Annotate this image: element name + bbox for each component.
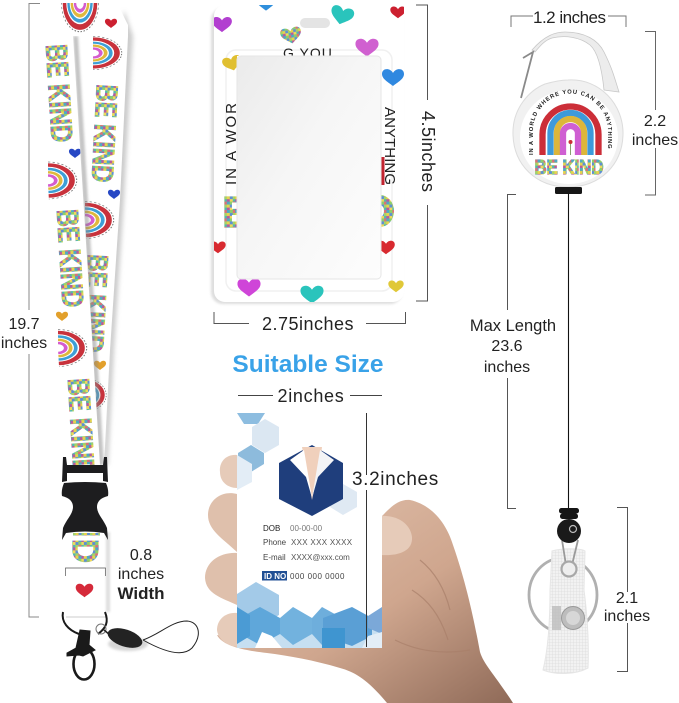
window [237,56,381,279]
holder print [210,0,406,303]
lanyard [39,3,198,680]
reel width bracket [511,16,626,27]
label: width: inches [118,566,164,583]
reel nub [555,187,582,194]
hand [205,455,513,703]
label: 2.2 inches [632,113,678,149]
finger 2 [208,493,237,552]
label: max length [470,317,556,376]
thumb tip [381,516,412,555]
clip height bracket [617,508,628,672]
left strap: BE KIND [39,43,78,143]
label: 1.2 inches: 1.2 inches [533,8,606,27]
reel arc text [533,94,608,155]
label: 2.1 inches: inches [604,608,650,625]
id card [237,413,382,648]
lanyard strap shadow [103,10,133,465]
lanyard top fold [39,3,128,36]
id text: Phone [263,538,287,547]
finger 3 [205,553,237,605]
palm and thumb [217,500,513,703]
id text: XXX XXX XXXX [291,538,353,547]
label: 3.2inches: 3.2inches [352,469,439,490]
id text: 00-00-00 [290,524,323,533]
id text [262,524,353,581]
label: 2.2 inches: 2.2 [644,113,666,130]
label: 2inches: 2inches [278,386,344,406]
badge reel: IN A WORLD WHERE YOU CAN BE ANYTHING [529,90,612,155]
id text: ID NO [264,572,286,581]
reel height bracket [645,32,656,195]
holder body [211,8,402,304]
reel be kind: BE KIND [534,157,604,179]
label: 2.1 inches: 2.1 [616,590,638,607]
label: inches: inches [1,335,47,352]
badge clip [529,508,597,674]
holder print: ANYTHING [381,107,398,185]
bracket: 2 inches [238,394,382,396]
reel body [513,80,623,187]
right strap: BE KIND [85,84,123,183]
card height bracket [366,413,368,647]
hook and ring [63,612,107,680]
left strap: BE KIND [61,377,100,477]
holder print: G YOU [283,45,333,61]
id text: DOB [263,524,280,533]
phone strap [104,621,198,653]
eyelet [562,562,576,576]
lanyard length bracket [29,4,40,617]
bottom hexagons [237,582,382,648]
carabiner gate [521,52,533,98]
label: 2.1 inches [604,590,650,625]
id text: 000 000 0000 [290,572,345,581]
badge reel [512,32,624,508]
label: 2.75inches: 2.75inches [262,314,354,334]
buckle [62,457,108,540]
lower strap: D [65,539,106,563]
slot [300,18,330,28]
id text: XXXX@xxx.com [291,553,350,562]
cord [568,193,570,508]
label: width [117,547,165,603]
left strap [45,36,100,465]
label: width: 0.8 [130,547,152,564]
top hexagons [237,413,357,515]
reel rainbow [542,107,598,155]
clips [562,540,578,565]
avatar [279,445,343,516]
label: 19.7 inches: 19.7 [8,316,40,333]
label: max length: Max Length [470,317,556,335]
label: max length: 23.6 [491,338,523,355]
vinyl strap [543,549,588,674]
left strap: BE KIND [50,208,89,308]
right strap [85,36,128,465]
lower strap [65,530,110,617]
heading: suitable size: Suitable Size [232,351,384,378]
max length bracket [508,194,516,508]
left strap shadow [73,36,104,465]
carabiner [532,32,619,92]
holder print: IN A WOR [223,103,240,185]
right strap: BE KIND [76,254,113,353]
holder width bracket [214,312,406,324]
finger 1 [220,455,237,488]
split ring [529,558,597,632]
holder print: E [222,188,251,237]
holder height bracket [416,5,428,301]
label: max length: inches [484,359,530,376]
bead [559,508,579,514]
card holder [210,0,406,304]
label: 2.2 inches: inches [632,132,678,149]
label: width: Width [117,584,165,603]
label: 4.5inches: 4.5inches [418,111,438,193]
finger 4 [217,613,237,647]
thumb creases [395,560,470,652]
snap [552,606,561,630]
id text: E-mail [263,553,286,562]
